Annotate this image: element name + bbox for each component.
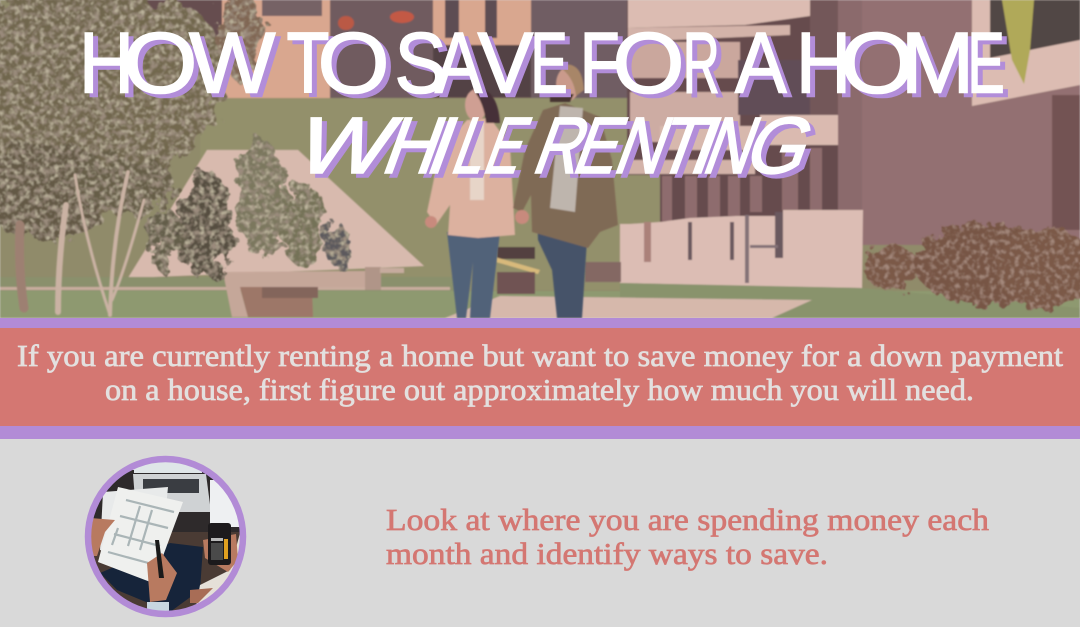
title line 2: N [699, 104, 777, 194]
left hand [90, 518, 115, 556]
title line 1: H [801, 20, 856, 116]
title line 1: O [123, 16, 198, 112]
distant bench behind the couple [497, 247, 535, 259]
title line 2: E [569, 104, 643, 194]
ground strips [127, 276, 453, 290]
title line 2: T [652, 104, 725, 194]
title line 1 [79, 16, 1010, 116]
navy trousers [100, 543, 203, 612]
ground floor columns [662, 176, 672, 221]
title line 2: T [647, 100, 720, 190]
planter walls [620, 210, 863, 288]
tip text [386, 502, 990, 571]
title line 1: E [535, 20, 573, 116]
title line 2: I [685, 104, 740, 194]
title line 2: I [421, 104, 476, 194]
icon: circular photo of budgeting paperwork and calculator [88, 459, 245, 617]
title line 1: A [740, 20, 792, 116]
title line 2: R [529, 104, 607, 194]
title line 1: R [688, 20, 725, 116]
title line 1: E [530, 16, 568, 112]
pink tint wash [478, 90, 586, 317]
title line 1: S [400, 20, 452, 116]
title line 1: A [735, 16, 787, 112]
title line 2: I [416, 100, 471, 190]
bushes right [864, 222, 1080, 310]
paper sheets [100, 487, 168, 550]
title line 1: O [318, 16, 390, 112]
title line 2: E [479, 104, 547, 194]
title line 1: A [435, 16, 483, 112]
title line 2: H [378, 104, 463, 194]
woman coat [427, 118, 515, 238]
lawn behind planters [626, 174, 661, 224]
title line 1: H [84, 20, 139, 116]
intro banner [0, 318, 1080, 439]
bench [223, 271, 366, 317]
title line 1: F [585, 20, 625, 116]
title line 1: F [580, 16, 620, 112]
right apartment block [860, 0, 1080, 245]
title line 2: G [735, 100, 827, 190]
title line 1: T [292, 20, 334, 116]
title line 1: S [394, 16, 446, 112]
title line 2: L [442, 100, 506, 190]
title line 1: R [683, 16, 720, 112]
title line 2 [285, 100, 832, 194]
title line 2: I [680, 100, 735, 190]
intro text: If you are currently renting a home but want to save money for a down payment [17, 338, 1063, 373]
title line 1: V [478, 16, 533, 112]
intro text: on a house, first figure out approximately how much you will need. [105, 372, 974, 407]
title line 1: E [967, 16, 1005, 112]
title line 2: E [474, 100, 542, 190]
title line 2: G [740, 104, 832, 194]
title line 1: M [901, 16, 974, 112]
man coat [513, 103, 618, 248]
couple [425, 64, 618, 318]
title line 1: W [189, 16, 275, 112]
title line 1: O [840, 16, 915, 112]
hand with pen [147, 553, 177, 602]
title line 1: O [845, 20, 920, 116]
title line 2: L [447, 104, 511, 194]
far building [146, 0, 532, 98]
title line 1: T [286, 16, 329, 112]
tip text: month and identify ways to save. [386, 536, 828, 571]
lawn in front [620, 283, 857, 290]
upper right balcony [972, 0, 1080, 106]
calculator phone [203, 534, 238, 572]
man jeans [537, 233, 588, 318]
title line 1: H [79, 16, 134, 112]
balcony slabs [628, 0, 810, 28]
title line 1: O [128, 20, 203, 116]
title [79, 16, 1010, 194]
title line 2: W [290, 104, 414, 194]
trees [0, 0, 350, 280]
title line 2: W [285, 100, 409, 190]
title line 2: N [610, 104, 690, 194]
intro text [17, 338, 1063, 407]
title line 2: N [694, 100, 772, 190]
woman jeans [447, 232, 500, 318]
concrete ramp wall [128, 150, 424, 278]
title line 1: M [906, 20, 979, 116]
title line 1: E [972, 20, 1010, 116]
tip text: Look at where you are spending money each [386, 502, 990, 537]
title line 1: O [612, 16, 684, 112]
title line 1: A [440, 20, 488, 116]
small hand [190, 588, 213, 603]
title line 2: H [373, 100, 458, 190]
hero photo: couple walking among apartment buildings [0, 0, 1080, 318]
title line 1: H [796, 16, 851, 112]
title line 1: O [322, 20, 394, 116]
birch trunks [20, 172, 144, 315]
title line 2: R [524, 100, 602, 190]
title line 1: W [194, 20, 280, 116]
title line 2: E [564, 100, 638, 190]
title line 1: O [618, 20, 690, 116]
title line 2: N [605, 100, 685, 190]
title line 1: V [483, 20, 538, 116]
